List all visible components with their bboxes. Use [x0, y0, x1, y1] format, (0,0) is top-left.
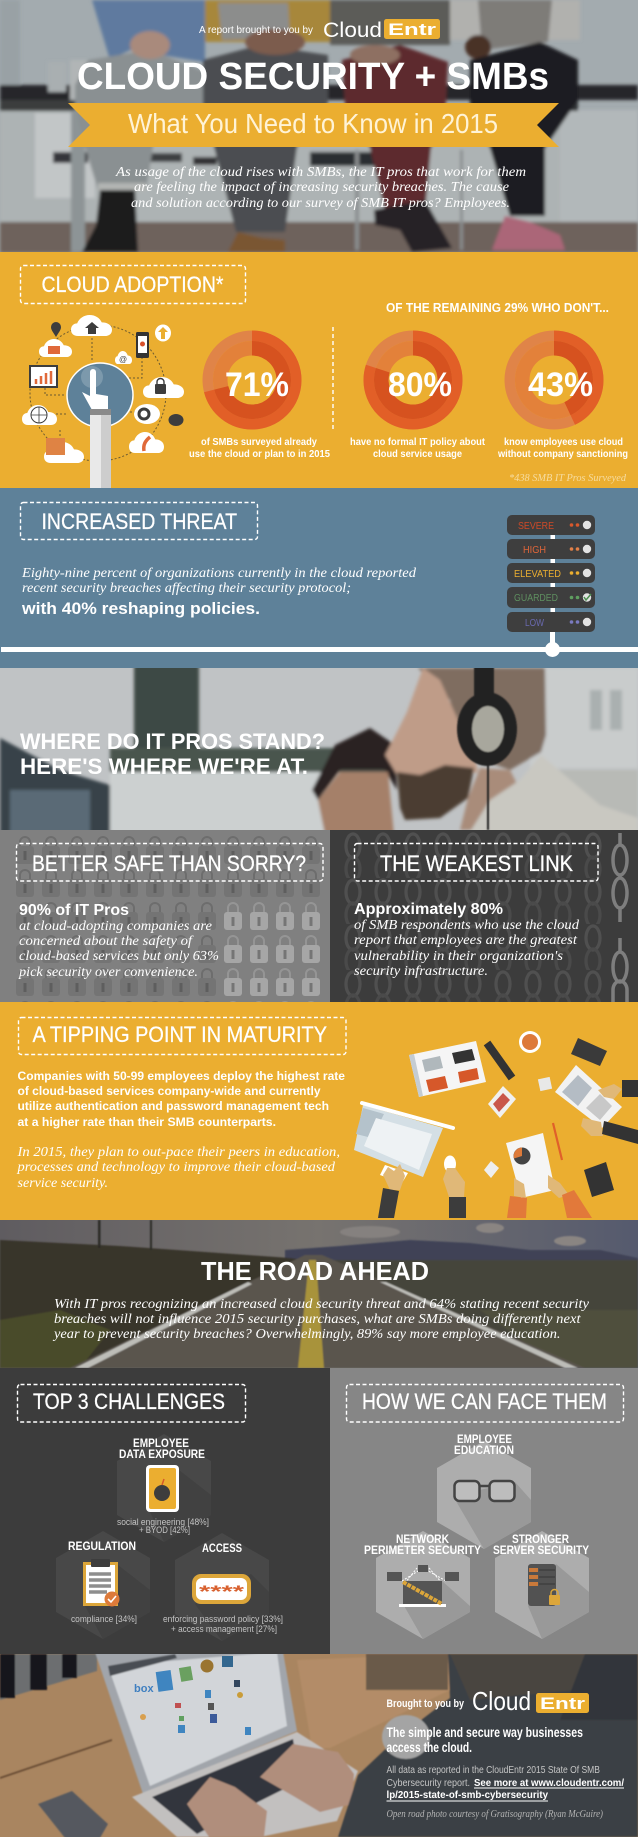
- icon: smartphone: [136, 332, 149, 358]
- icon: glasses: [454, 1481, 514, 1501]
- ribbon banner: [68, 103, 559, 147]
- level: high: HIGH: [523, 544, 546, 556]
- weakest link text: vulnerability in their organization's: [354, 948, 563, 963]
- mouse and hand: [443, 1156, 466, 1218]
- subheading: remaining 29%: OF THE REMAINING 29% WHO DON'T...: [386, 301, 609, 315]
- survey footnote: *438 SMB IT Pros Surveyed: [509, 472, 626, 484]
- logo: CloudEntr: [323, 19, 440, 42]
- icon cluster: cloud services and pointing hand: [22, 315, 184, 488]
- caption: 43%: know employees use cloud: [504, 436, 623, 448]
- threat level server stack: [507, 515, 595, 632]
- logo: CloudEntr: Entr: [388, 20, 437, 39]
- challenge: access: [163, 1533, 283, 1641]
- safety text: [18, 902, 219, 979]
- ruler: [487, 1043, 512, 1078]
- icon: chat bubble: [168, 414, 184, 426]
- title: CLOUD SECURITY + SMBs: [77, 56, 549, 98]
- tagline: [386, 1725, 583, 1755]
- tagline: The simple and secure way businesses: [386, 1725, 583, 1740]
- icon: pointing hand on circle: [67, 363, 133, 488]
- timeline line and node: [1, 632, 638, 657]
- heading: increased threat: [20, 502, 258, 540]
- challenge: regulation: REGULATION: [68, 1541, 136, 1553]
- report sheet with hand: [555, 1065, 638, 1128]
- heading: cloud adoption: CLOUD ADOPTION*: [42, 272, 224, 297]
- maturity bold text: Companies with 50-99 employees deploy the highest rate: [18, 1071, 345, 1083]
- brought to you by logo line: Entr: [540, 1694, 586, 1713]
- maturity italic text: [16, 1144, 340, 1190]
- heading: how we can face them: HOW WE CAN FACE THEM: [362, 1389, 607, 1414]
- donut chart: 71%: 71%: [225, 366, 289, 404]
- logo: CloudEntr: Cloud: [323, 19, 382, 42]
- icon: telephone cloud: [129, 432, 164, 453]
- panel: tipping point in maturity: [0, 1002, 638, 1220]
- lower hand and sleeve: [581, 1118, 638, 1144]
- icon: map pin: [51, 322, 61, 337]
- blueprint sheet: [409, 1041, 486, 1097]
- solution: stronger server security: [493, 1531, 589, 1639]
- heading: top 3 challenges: [18, 1384, 246, 1422]
- brought to you by logo line: Brought to you by: [386, 1698, 465, 1710]
- donut chart: 43%: 43%: [528, 366, 593, 404]
- solution: employee education: EMPLOYEE: [457, 1434, 512, 1446]
- pencil: [553, 1123, 562, 1160]
- solution: network perimeter security: PERIMETER SECURITY: [364, 1545, 481, 1557]
- safety text: 90% of IT Pros: [19, 902, 129, 919]
- tablet: [571, 1038, 607, 1066]
- intro paragraph: As usage of the cloud rises with SMBs, the IT pros that work for them: [115, 164, 526, 179]
- panel: better safe than sorry: [0, 830, 330, 1002]
- icon: lock cloud: [143, 377, 184, 398]
- panel: cloud adoption: [0, 252, 638, 488]
- heading: the weakest link: [354, 844, 598, 881]
- icon: growth chart: [30, 366, 57, 387]
- panel: how we can face them: [330, 1368, 638, 1654]
- heading: the road ahead: THE ROAD AHEAD: [201, 1256, 429, 1286]
- photo: open road: [0, 1220, 638, 1368]
- panel: the weakest link: [330, 830, 638, 1002]
- header photo: seated people: [0, 0, 638, 253]
- panel: top 3 challenges: [0, 1368, 330, 1654]
- caption: 71%: [189, 436, 330, 460]
- caption: 80%: [350, 436, 485, 460]
- data source note: All data as reported in the CloudEntr 2015 State Of SMB: [386, 1765, 600, 1776]
- icon: at sign cloud: [115, 351, 132, 364]
- brought to you by logo line: Cloud: [472, 1686, 531, 1716]
- solution: employee education: [437, 1434, 531, 1549]
- panel: where do IT pros stand: [0, 664, 638, 835]
- road ahead paragraph: With IT pros recognizing an increased cloud security threat and 64% stating recent security: [54, 1296, 590, 1311]
- threat paragraph: with 40% reshaping policies.: [21, 599, 260, 618]
- challenge: access: ACCESS: [202, 1543, 242, 1555]
- heading: tipping point: A TIPPING POINT IN MATURITY: [32, 1022, 327, 1047]
- heading: better safe than sorry: [16, 844, 323, 881]
- heading: where do IT pros stand: HERE'S WHERE WE'RE AT.: [20, 754, 308, 779]
- threat paragraph: [21, 565, 416, 618]
- photo: IT worker with headset: [0, 664, 638, 835]
- road ahead paragraph: [52, 1296, 590, 1341]
- challenge: employee data exposure: social engineering [48%]: [117, 1517, 209, 1528]
- intro paragraph: are feeling the impact of increasing security breaches. The cause: [134, 179, 509, 194]
- heading: top 3 challenges: TOP 3 CHALLENGES: [33, 1389, 225, 1414]
- icon: gear cloud: [134, 404, 160, 424]
- data source note: lp/2015-state-of-smb-cybersecurity: [386, 1789, 548, 1801]
- challenge: employee data exposure: + BYOD [42%]: [139, 1525, 190, 1536]
- road ahead paragraph: breaches will not influence 2015 security purchases, what are SMBs doing differently next: [54, 1311, 582, 1326]
- calculator: [488, 1086, 516, 1118]
- challenge: employee data exposure: DATA EXPOSURE: [119, 1449, 205, 1461]
- level: low: LOW: [525, 617, 544, 629]
- solution: stronger server security: STRONGER: [512, 1534, 570, 1546]
- donut chart: 80%: [369, 336, 457, 424]
- report credit: A report brought to you by: [199, 24, 314, 36]
- road ahead paragraph: year to prevent security breaches? Overwhelmingly, 89% say more employee education.: [52, 1326, 561, 1341]
- orange sleeves: [507, 1190, 592, 1218]
- solution: network perimeter security: NETWORK: [396, 1534, 450, 1546]
- heading: better safe than sorry: BETTER SAFE THAN SORRY?: [32, 851, 306, 876]
- donut chart: 71%: [208, 336, 296, 424]
- level: guarded: GUARDED: [514, 592, 558, 604]
- challenge: access: enforcing password policy [33%]: [163, 1614, 283, 1625]
- icon: server with lock: [528, 1564, 560, 1606]
- panel: brought to you by: [0, 1652, 638, 1837]
- heading: where do IT pros stand: [20, 729, 325, 779]
- notebook: [584, 1162, 614, 1197]
- caption: 43%: [497, 436, 628, 460]
- ribbon banner: What You Need to Know in 2015: [128, 108, 498, 139]
- heading: the weakest link: THE WEAKEST LINK: [380, 851, 573, 876]
- photo credit: Open road photo courtesy of Gratisography (Ryan McGuire): [386, 1809, 603, 1820]
- icon: globe cloud: [22, 405, 57, 425]
- data source note: Cybersecurity report.: [386, 1778, 470, 1789]
- maturity bold text: at a higher rate than their SMB counterparts.: [18, 1117, 276, 1129]
- caption: 80%: cloud service usage: [373, 448, 462, 460]
- photo: laptop on wooden table: [0, 1652, 638, 1837]
- maturity italic text: service security.: [18, 1175, 108, 1190]
- icon: upload arrow: [155, 324, 171, 342]
- icon: mail cloud: [39, 339, 72, 357]
- weakest link text: [354, 901, 579, 978]
- challenge: regulation: compliance [34%]: [71, 1614, 137, 1625]
- challenge: access: + access management [27%]: [171, 1624, 277, 1635]
- panel: increased threat: [0, 488, 638, 668]
- heading: tipping point: [18, 1018, 346, 1054]
- left arm on trackpad: [378, 1164, 405, 1218]
- maturity bold text: of cloud-based services company-wide and currently: [18, 1086, 321, 1098]
- weakest link text: security infrastructure.: [354, 963, 488, 978]
- illustration: desk with laptop, papers and hands: [354, 1031, 638, 1218]
- maturity bold text: [18, 1071, 345, 1129]
- safety text: pick security over convenience.: [18, 964, 198, 979]
- heading: cloud adoption: [20, 266, 246, 304]
- safety text: at cloud-adopting companies are: [19, 918, 212, 933]
- caption: 71%: use the cloud or plan to in 2015: [189, 448, 330, 460]
- weakest link text: of SMB respondents who use the cloud: [354, 917, 579, 932]
- safety text: cloud-based services but only 63%: [19, 948, 219, 963]
- donut chart: 43%: [510, 336, 598, 424]
- challenge: employee data exposure: EMPLOYEE: [133, 1438, 189, 1450]
- coffee cup: [519, 1031, 541, 1053]
- safety text: concerned about the safety of: [19, 933, 194, 948]
- heading: how we can face them: [346, 1384, 624, 1422]
- data source note: See more at www.cloudentr.com/: [474, 1777, 624, 1789]
- icon: hanging chains: [613, 833, 627, 1002]
- icon: headphones: [457, 664, 517, 830]
- small card: [484, 1161, 499, 1178]
- icon: clipboard with check: [83, 1559, 120, 1606]
- maturity italic text: In 2015, they plan to out-pace their peers in education,: [16, 1144, 340, 1159]
- intro paragraph: and solution according to our survey of SMB IT pros? Employees.: [131, 195, 510, 210]
- icon: at sign cloud: @: [119, 355, 127, 364]
- icon: message cloud: [44, 438, 84, 463]
- heading: increased threat: INCREASED THREAT: [42, 509, 237, 534]
- maturity bold text: utilize authentication and password management tech: [18, 1101, 329, 1113]
- weakest link text: Approximately 80%: [354, 901, 503, 918]
- solution: employee education: EDUCATION: [454, 1445, 514, 1457]
- donut chart: 80%: 80%: [388, 366, 452, 404]
- small note: [538, 1077, 552, 1091]
- data source note: [386, 1765, 624, 1801]
- solution: stronger server security: SERVER SECURITY: [493, 1545, 589, 1557]
- panel: the road ahead: [0, 1220, 638, 1368]
- icon: phone with bomb: [146, 1465, 179, 1512]
- threat paragraph: Eighty-nine percent of organizations currently in the cloud reported: [21, 565, 416, 580]
- caption: 80%: have no formal IT policy about: [350, 436, 485, 448]
- icon: password field: ****: [199, 1582, 245, 1601]
- header section: [0, 0, 638, 253]
- brought to you by logo line: [386, 1686, 589, 1716]
- pie chart document and hand: [506, 1133, 569, 1198]
- solution: network perimeter security: [364, 1531, 481, 1639]
- threat paragraph: recent security breaches affecting their security protocol;: [22, 580, 351, 595]
- laptop screen app icons: box: [134, 1683, 154, 1695]
- tagline: access the cloud.: [386, 1740, 472, 1755]
- challenge: employee data exposure: [117, 1434, 211, 1542]
- icon: home cloud: [71, 315, 112, 336]
- maturity italic text: processes and technology to improve their cloud-based: [16, 1159, 335, 1174]
- icon: chained laptop network: [387, 1565, 459, 1607]
- challenge: regulation: [56, 1531, 150, 1639]
- caption: 71%: of SMBs surveyed already: [201, 436, 317, 448]
- weakest link text: report that employees are the greatest: [354, 932, 578, 947]
- laptop: [354, 1103, 453, 1183]
- intro paragraph: [115, 164, 526, 210]
- laptop screen app icons: [134, 1656, 251, 1735]
- heading: where do IT pros stand: WHERE DO IT PROS STAND?: [20, 729, 325, 754]
- level: severe: SEVERE: [518, 520, 554, 532]
- level: elevated: ELEVATED: [514, 568, 561, 580]
